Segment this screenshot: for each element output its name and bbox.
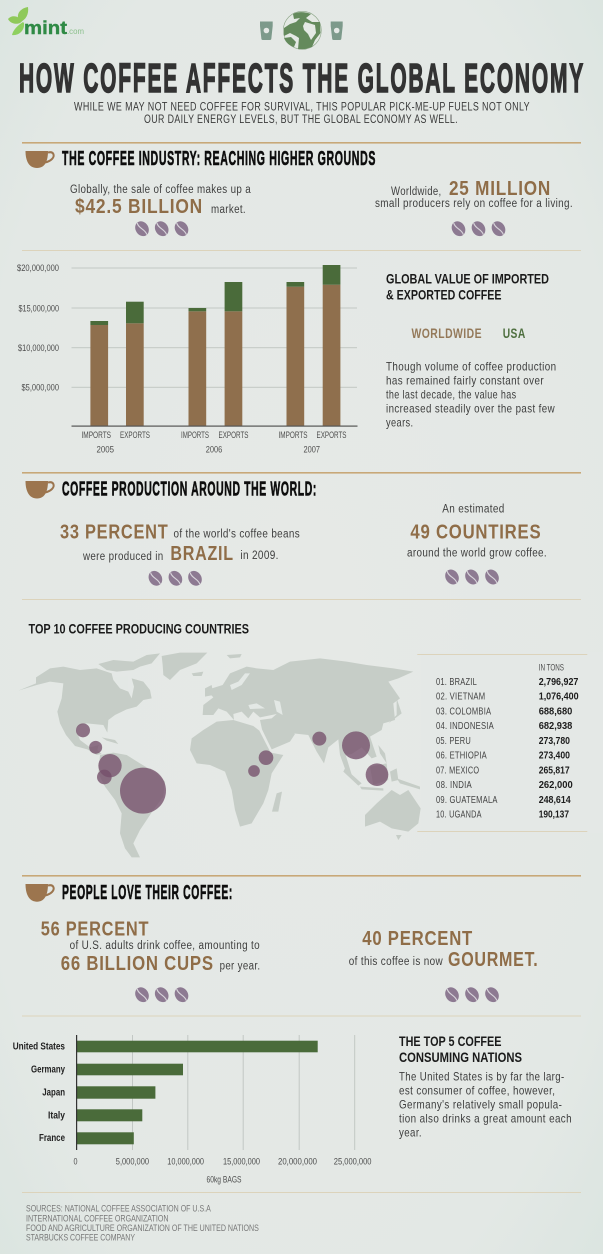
- table: top 10 producers: 262,000: [539, 780, 573, 791]
- bubble: Guatemala: [89, 741, 102, 754]
- sources: FOOD AND AGRICULTURE ORGANIZATION OF THE UNITED NATIONS: [26, 1223, 259, 1233]
- icon: coffee cup: [26, 151, 54, 168]
- bar chart: global value of coffee: IMPORTS: [82, 430, 111, 440]
- callout: 33 percent: [60, 521, 300, 565]
- table: top 10 producers: IN TONS: [539, 663, 564, 673]
- table: top 10 producers: 688,680: [539, 706, 573, 718]
- chart heading: & EXPORTED COFFEE: [386, 286, 502, 302]
- world map with production bubbles: [18, 653, 421, 857]
- bubble: Uganda: [248, 765, 260, 777]
- table: top 10 producers: 2,796,927: [539, 677, 579, 688]
- table: top 10 producers: 06. ETHIOPIA: [436, 751, 487, 762]
- callout: 56 percent: [41, 919, 260, 975]
- chart heading: CONSUMING NATIONS: [399, 1049, 522, 1065]
- callout: 40 percent: [349, 928, 538, 971]
- bar chart: global value of coffee: IMPORTS: [278, 430, 308, 440]
- text block: consumers description: [399, 1070, 572, 1140]
- bar chart: global value of coffee: [17, 263, 358, 454]
- section heading: PEOPLE LOVE THEIR COFFEE:: [62, 882, 233, 904]
- callout: 40 percent: of this coffee is now: [349, 956, 443, 968]
- icon: coffee beans right: [449, 219, 508, 239]
- table: top 10 producers: 04. INDONESIA: [436, 721, 494, 732]
- bubble: Peru: [97, 770, 112, 784]
- table: top 10 producers: 08. INDIA: [436, 780, 472, 791]
- bar chart: global value of coffee: 2005: [96, 444, 114, 454]
- text block: chart description: [386, 360, 556, 430]
- icon: coffee cup: [26, 884, 54, 902]
- callout: 33 percent: were produced in: [82, 551, 164, 563]
- callout: 33 percent: of the world's coffee beans: [174, 529, 300, 541]
- callout: 33 percent: BRAZIL: [170, 543, 234, 565]
- section heading: COFFEE PRODUCTION AROUND THE WORLD:: [62, 479, 317, 501]
- table: top 10 producers: 05. PERU: [436, 736, 471, 747]
- bubble: Mexico: [76, 723, 90, 737]
- table: top 10 producers: 07. MEXICO: [436, 766, 479, 776]
- text block: consumers description: The United States is by far the larg-: [399, 1070, 565, 1084]
- callout: 40 percent: GOURMET.: [448, 949, 538, 971]
- table: top 10 producers: 02. VIETNAM: [436, 692, 485, 703]
- table: top 10 producers: [417, 652, 603, 833]
- callout: 56 percent: per year.: [220, 960, 260, 972]
- chart heading: [399, 1033, 522, 1065]
- callout: 40 percent: 40 PERCENT: [362, 928, 473, 950]
- table: top 10 producers: 273,400: [539, 751, 570, 762]
- callout: 49 countries: [407, 504, 547, 560]
- callout: 56 percent: 66 BILLION CUPS: [61, 953, 214, 975]
- callout: 42.5 billion: Globally, the sale of coffee makes up a: [70, 184, 251, 196]
- callout: 33 percent: 33 PERCENT: [60, 521, 168, 543]
- callout: 25 million: 25 MILLION: [449, 178, 551, 200]
- callout: 49 countries: An estimated: [442, 504, 505, 516]
- text block: consumers description: est consumer of coffee, however,: [399, 1084, 555, 1098]
- bar chart: global value of coffee: $5,000,000: [22, 382, 59, 392]
- callout: 42.5 billion: [70, 184, 251, 218]
- subtitle: [74, 102, 530, 126]
- chart heading: GLOBAL VALUE OF IMPORTED: [386, 270, 549, 286]
- table: top 10 producers: 01. BRAZIL: [436, 677, 477, 688]
- panel: the coffee industry: [26, 148, 573, 239]
- bar chart: top 5 consuming nations: 20,000,000: [278, 1157, 317, 1167]
- bubble: Vietnam: [342, 731, 370, 759]
- chart heading: [386, 270, 549, 302]
- callout: 42.5 billion: $42.5 BILLION: [75, 196, 203, 218]
- bubble: India: [312, 732, 326, 746]
- bar chart: top 5 consuming nations: Germany: [31, 1063, 65, 1075]
- sources: STARBUCKS COFFEE COMPANY: [26, 1233, 135, 1243]
- table: top 10 producers: 273,780: [539, 736, 570, 747]
- bar chart: top 5 consuming nations: France: [39, 1132, 65, 1144]
- bar chart: global value of coffee: 2007: [304, 444, 320, 454]
- icon: coffee beans left: [132, 219, 191, 239]
- icon: coffee beans left: [146, 568, 205, 588]
- bubble: Ethiopia: [259, 750, 273, 765]
- bubble: Indonesia: [366, 763, 388, 786]
- sources: SOURCES: NATIONAL COFFEE ASSOCIATION OF U.S.A: [26, 1204, 211, 1214]
- callout: 25 million: [375, 178, 573, 210]
- bar chart: global value of coffee: $10,000,000: [18, 343, 59, 353]
- icon: coffee beans left: [132, 985, 191, 1005]
- text block: chart description: years.: [386, 416, 414, 430]
- icon: globe: [283, 11, 321, 49]
- callout: 33 percent: in 2009.: [240, 550, 279, 562]
- logo: mint.com: [8, 7, 84, 38]
- table: top 10 producers: 248,614: [539, 795, 571, 806]
- text block: chart description: increased steadily over the past few: [386, 402, 555, 416]
- bar chart: global value of coffee: IMPORTS: [181, 430, 209, 440]
- map heading: TOP 10 COFFEE PRODUCING COUNTRIES: [28, 621, 249, 636]
- logo: mint.com: mint: [24, 18, 67, 38]
- logo: mint.com: .com: [67, 27, 84, 36]
- icon: coffee cup: [26, 481, 54, 498]
- subtitle: OUR DAILY ENERGY LEVELS, BUT THE GLOBAL ECONOMY AS WELL.: [144, 114, 458, 126]
- bar chart: top 5 consuming nations: 10,000,000: [167, 1157, 204, 1167]
- bar chart: top 5 consuming nations: 25,000,000: [334, 1157, 372, 1167]
- icon: coffee beans right: [442, 985, 502, 1005]
- table: top 10 producers: 1,076,400: [539, 692, 579, 703]
- callout: 49 countries: 49 COUNTIRES: [410, 521, 541, 543]
- icon: coffee beans right: [442, 567, 502, 587]
- icon: right coffee cup: [331, 22, 343, 40]
- bar chart: top 5 consuming nations: 15,000,000: [223, 1157, 260, 1167]
- bar chart: top 5 consuming nations: [13, 1035, 371, 1184]
- panel: people love their coffee: [26, 882, 538, 1005]
- chart heading: THE TOP 5 COFFEE: [399, 1033, 502, 1049]
- bubble: Brazil: [120, 768, 166, 814]
- table: top 10 producers: 09. GUATEMALA: [436, 795, 498, 806]
- icon: left coffee cup: [260, 22, 273, 40]
- text block: chart description: has remained fairly constant over: [386, 374, 544, 388]
- callout: 56 percent: of U.S. adults drink coffee, amounting to: [70, 940, 260, 952]
- bar chart: global value of coffee: $20,000,000: [17, 263, 59, 273]
- text block: chart description: Though volume of coffee production: [386, 360, 556, 374]
- bar chart: top 5 consuming nations: Japan: [42, 1086, 65, 1098]
- bar chart: global value of coffee: EXPORTS: [316, 430, 346, 440]
- sources: [26, 1204, 259, 1243]
- bar chart: global value of coffee: EXPORTS: [120, 430, 150, 440]
- bar chart: top 5 consuming nations: 0: [74, 1157, 78, 1167]
- legend: WORLDWIDE: [412, 325, 482, 341]
- table: top 10 producers: 265,817: [539, 766, 570, 776]
- callout: 25 million: Worldwide,: [391, 186, 442, 198]
- table: top 10 producers: 10. UGANDA: [436, 810, 482, 821]
- text block: consumers description: Germany's relatively small popula-: [399, 1098, 562, 1112]
- sources: INTERNATIONAL COFFEE ORGANIZATION: [26, 1213, 168, 1223]
- bar chart: global value of coffee: $15,000,000: [18, 304, 59, 314]
- text block: consumers description: year.: [399, 1126, 422, 1140]
- panel: coffee production: [26, 479, 547, 588]
- bar chart: top 5 consuming nations: Italy: [48, 1109, 65, 1121]
- callout: 42.5 billion: market.: [211, 204, 246, 216]
- bar chart: top 5 consuming nations: United States: [13, 1040, 65, 1052]
- bar chart: top 5 consuming nations: 60kg BAGS: [206, 1174, 242, 1184]
- bar chart: global value of coffee: EXPORTS: [218, 430, 248, 440]
- callout: 49 countries: around the world grow coffee.: [407, 548, 547, 560]
- bar chart: global value of coffee: 2006: [206, 444, 222, 454]
- legend: USA: [503, 325, 526, 341]
- table: top 10 producers: 03. COLOMBIA: [436, 706, 491, 718]
- table: top 10 producers: 190,137: [539, 810, 569, 821]
- text block: chart description: the last decade, the value has: [386, 388, 516, 402]
- callout: 25 million: small producers rely on coffee for a living.: [375, 198, 573, 210]
- table: top 10 producers: 682,938: [539, 721, 573, 732]
- bubble: Colombia: [98, 754, 122, 777]
- bar chart: top 5 consuming nations: 5,000,000: [116, 1157, 149, 1167]
- callout: 56 percent: 56 PERCENT: [41, 919, 149, 941]
